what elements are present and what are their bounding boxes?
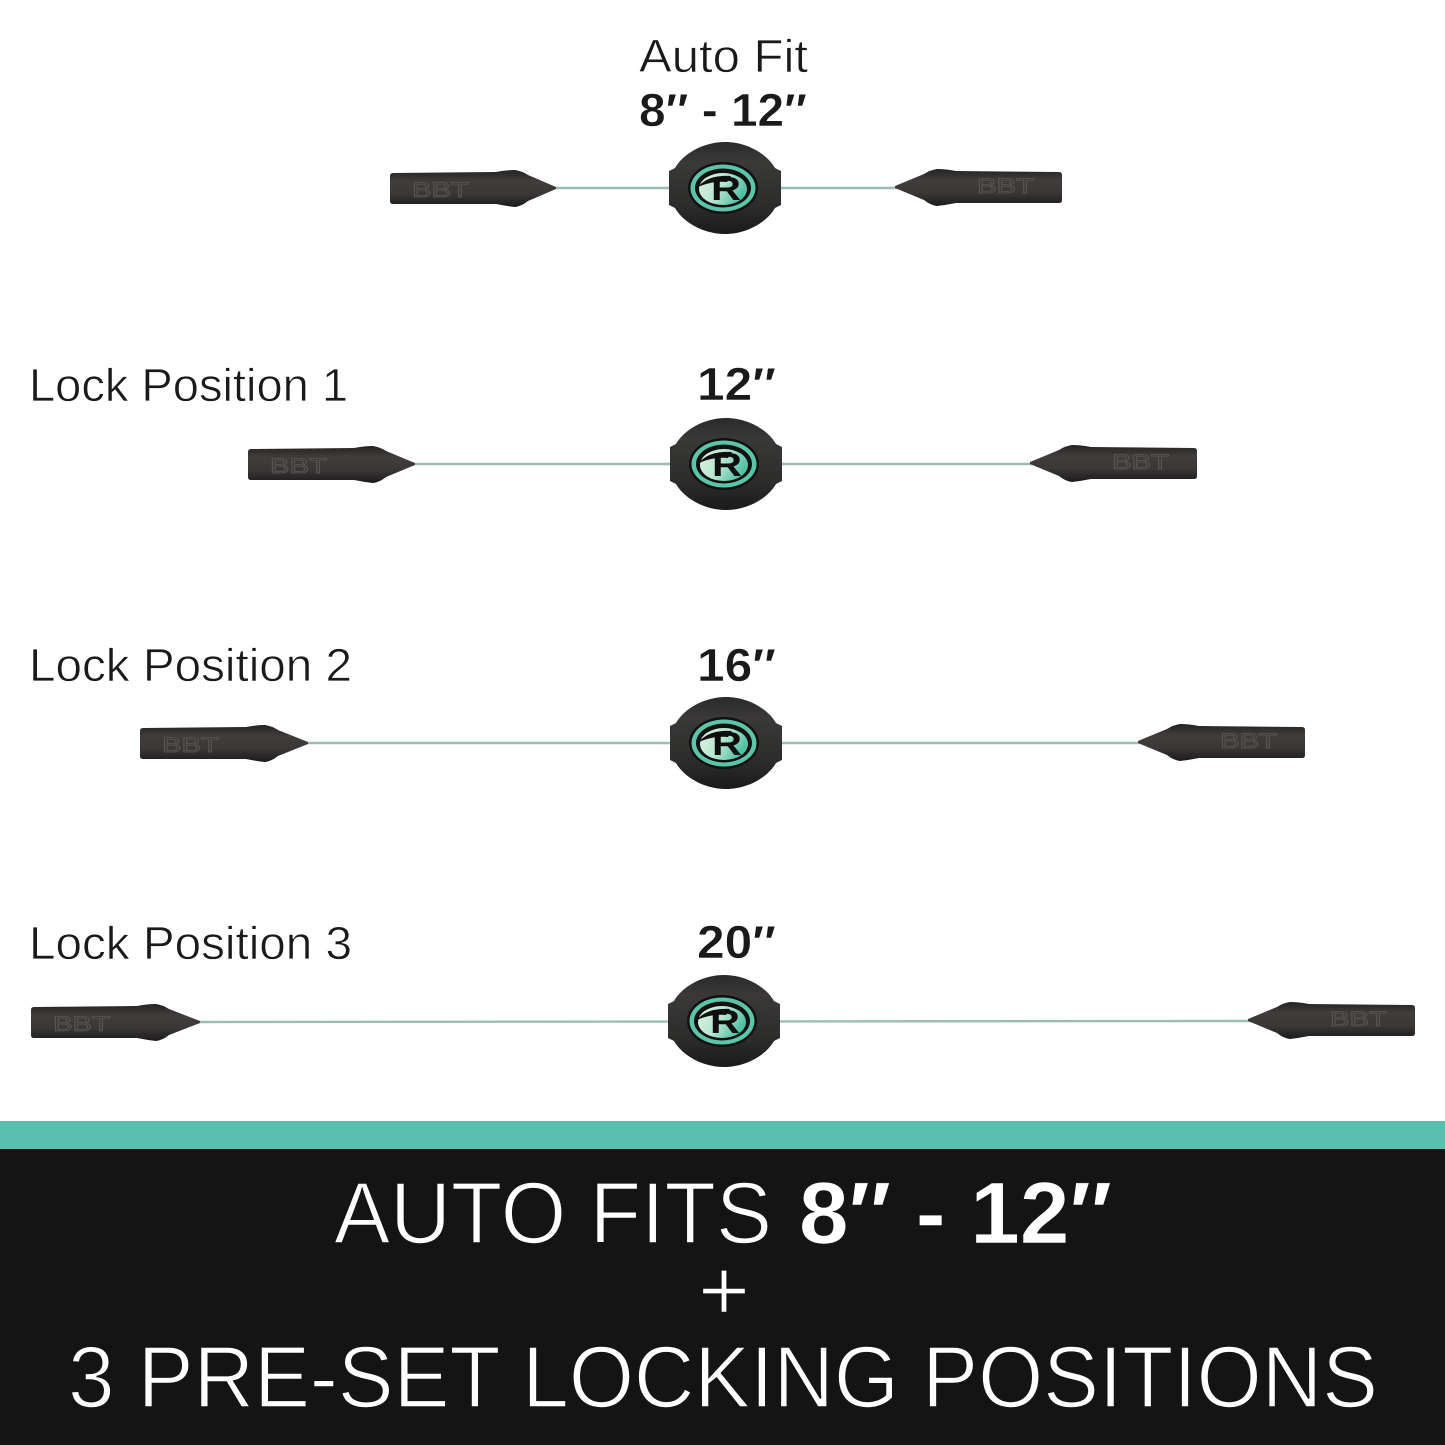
label: lock position 2: Lock Position 2 bbox=[29, 639, 352, 691]
retractor badge bbox=[669, 142, 781, 234]
left end plug bbox=[390, 170, 556, 207]
right end plug bbox=[1030, 445, 1197, 482]
left end plug bbox=[248, 446, 415, 483]
right end plug: BBT bbox=[1112, 451, 1169, 474]
right end plug bbox=[1138, 724, 1305, 761]
right end plug: BBT bbox=[977, 175, 1034, 198]
label: lock position 1: Lock Position 1 bbox=[29, 359, 348, 411]
value: 16 inch: 16″ bbox=[697, 639, 776, 691]
retractor badge: R bbox=[712, 446, 742, 483]
banner line: locking positions: 3 PRE-SET LOCKING POSITIONS bbox=[68, 1329, 1378, 1426]
retractor badge: R bbox=[711, 170, 741, 207]
right end plug: BBT bbox=[1330, 1008, 1387, 1031]
left end plug: BBT bbox=[53, 1013, 110, 1036]
cord assembly: lock position 2 bbox=[140, 697, 1305, 789]
retractor badge bbox=[670, 418, 782, 510]
label: lock position 3: Lock Position 3 bbox=[29, 917, 352, 969]
banner: summary bbox=[0, 1121, 1445, 1445]
left end plug: BBT bbox=[162, 734, 219, 757]
cord assembly: lock position 1 bbox=[248, 418, 1197, 510]
heading: auto fit bbox=[639, 30, 808, 136]
value: 12 inch: 12″ bbox=[697, 358, 776, 410]
banner line: auto fits bbox=[334, 1165, 1112, 1262]
left end plug: BBT bbox=[270, 455, 327, 478]
retractor badge: R bbox=[712, 725, 742, 762]
heading: auto fit: 8″ - 12″ bbox=[639, 84, 807, 136]
left end plug bbox=[140, 725, 308, 762]
cord assembly: auto fit bbox=[390, 142, 1062, 234]
banner line: plus: + bbox=[698, 1242, 750, 1339]
right end plug: BBT bbox=[1220, 730, 1277, 753]
retractor badge bbox=[668, 975, 780, 1067]
retractor badge: R bbox=[710, 1003, 740, 1040]
heading: auto fit: Auto Fit bbox=[639, 30, 808, 82]
right end plug bbox=[1248, 1002, 1415, 1039]
left end plug bbox=[31, 1004, 200, 1041]
banner line: auto fits: AUTO FITS bbox=[334, 1165, 772, 1262]
retractor badge bbox=[670, 697, 782, 789]
right end plug bbox=[895, 169, 1062, 206]
cord assembly: lock position 3 bbox=[31, 975, 1415, 1067]
left end plug: BBT bbox=[412, 179, 469, 202]
banner line: auto fits: 8″ - 12″ bbox=[799, 1165, 1112, 1262]
value: 20 inch: 20″ bbox=[697, 916, 776, 968]
